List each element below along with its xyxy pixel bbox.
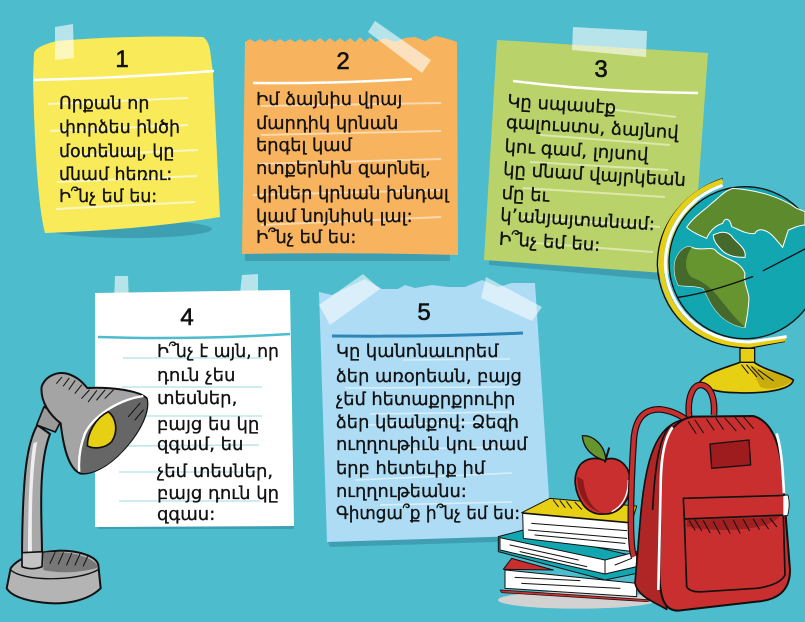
- note 3 guide lines: [523, 109, 676, 252]
- icon: stack of books: [498, 498, 657, 609]
- note 3 riddle text: կը մնամ վայրկեան: [503, 159, 686, 191]
- apple leaf: [582, 436, 606, 461]
- note 2 paper: [242, 36, 458, 255]
- note 1 riddle text: մօտենալ, կը: [59, 142, 174, 162]
- icon: globe: [657, 179, 805, 393]
- bottom book page lines: [515, 577, 620, 588]
- note 4 heading rule: [98, 334, 290, 338]
- books shadow: [498, 591, 657, 609]
- note 3 shadow: [489, 258, 660, 280]
- panel: note 5 blue: [319, 274, 560, 547]
- note 1 number: 1: [115, 46, 129, 73]
- middle book: [498, 530, 637, 580]
- note 4 riddle text: չեմ տեսներ,: [157, 461, 273, 482]
- note 5 riddle text: ուղղութեանս:: [336, 481, 467, 502]
- backpack hatch marks: [688, 417, 777, 534]
- backpack pocket flap: [683, 495, 789, 519]
- note 4 riddle text: Ի՞նչ է այն, որ: [157, 341, 279, 362]
- note 3 paper: [484, 40, 708, 275]
- note 3 number: 3: [594, 56, 608, 83]
- globe land shading: [674, 247, 745, 327]
- panel: note 1 yellow: [33, 24, 220, 238]
- lamp shade inner: [80, 397, 147, 473]
- note 2 guide lines: [253, 103, 441, 225]
- lamp sleeve: [22, 552, 43, 569]
- globe equator: [678, 249, 805, 297]
- apple highlight: [612, 480, 628, 512]
- note 4 paper: [95, 290, 294, 527]
- bottom book spine: [500, 590, 653, 602]
- top book pages: [523, 513, 633, 552]
- note 4 shadow: [98, 524, 294, 529]
- note 5 number: 5: [417, 299, 431, 326]
- lamp base: [7, 551, 101, 603]
- globe sphere: [669, 187, 805, 339]
- note 5 riddle text: ձեր առօրեան, բայց: [336, 366, 522, 387]
- note 2 riddle text: կիներ կրնան խնդալ: [256, 183, 450, 204]
- globe stand post: [740, 348, 755, 362]
- apple body: [575, 458, 631, 514]
- globe base shading: [750, 365, 793, 389]
- note 4 riddle text: դուն չես: [157, 365, 235, 386]
- backpack label patch: [710, 440, 751, 468]
- lamp hatch marks: [50, 377, 143, 566]
- note 3 riddle text: գալուստս, ձայնով: [505, 112, 680, 144]
- backpack top handle: [689, 385, 714, 418]
- note 2 number: 2: [336, 48, 350, 75]
- top book hatch marks: [553, 500, 582, 509]
- bottom book: [500, 558, 653, 602]
- note 2 riddle text: ոտքերնին զարնել,: [256, 158, 431, 179]
- lamp bulb: [87, 412, 116, 448]
- note 5 riddle text: [336, 341, 528, 524]
- note 4 riddle text: բայց ես կը: [157, 414, 259, 435]
- note 1 riddle text: [59, 94, 180, 207]
- note 3 riddle text: մը եւ: [501, 183, 551, 207]
- note 4 guide lines: [119, 358, 263, 501]
- note 2 riddle text: Իմ ձայնիս վրայ: [256, 89, 402, 110]
- globe land arabia: [713, 232, 745, 257]
- backpack pocket: [684, 515, 785, 592]
- note 5 paper: [319, 279, 552, 542]
- note 2 heading rule: [253, 79, 412, 83]
- apple shading: [577, 477, 603, 513]
- lamp shade: [41, 373, 147, 474]
- bottom book top cover: [503, 558, 553, 570]
- middle book page lines: [510, 545, 632, 567]
- backpack body: [659, 416, 790, 611]
- note 5 riddle text: ուղղութիւն կու տամ: [336, 434, 528, 455]
- globe base hatch marks: [742, 365, 773, 381]
- note 3 riddle text: Ի՞նչ եմ ես:: [498, 229, 601, 256]
- note 4 riddle text: բայց դուն կը: [157, 483, 279, 504]
- lamp arm: [22, 425, 50, 553]
- note 5 riddle text: չեմ հետաքրքրուիր: [336, 389, 515, 410]
- note 1 riddle text: մնամ հեռու:: [59, 165, 172, 185]
- apple stem: [605, 448, 609, 462]
- note 5 riddle text: ձեր կեանքով: Ձեզի: [336, 412, 519, 433]
- note 4 riddle text: զգամ, ես: [157, 434, 243, 455]
- note 5 shadow: [327, 534, 560, 547]
- top book cover: [522, 498, 637, 523]
- note 1 tape: [55, 24, 74, 60]
- note 1 guide lines: [48, 98, 198, 209]
- bottom book pages: [505, 570, 637, 597]
- note 1 riddle text: փորձես ինծի: [59, 118, 180, 138]
- note 4 riddle text: [157, 341, 279, 525]
- note 3 riddle text: [498, 91, 691, 261]
- note 5 heading rule: [332, 333, 523, 336]
- backpack pocket shade: [687, 517, 780, 530]
- lamp base top shading: [43, 552, 98, 572]
- note 1 paper: [33, 36, 220, 233]
- note 4 riddle text: զգաս:: [157, 504, 215, 525]
- backpack side panel: [635, 420, 682, 609]
- note 2 riddle text: Ի՞նչ եմ ես:: [256, 227, 356, 248]
- note 3 heading rule: [513, 81, 698, 93]
- note 1 riddle text: Ի՞նչ եմ ես:: [59, 186, 157, 207]
- note 2 tape: [368, 21, 431, 73]
- note 3 riddle text: Կը սպասէք: [507, 91, 617, 119]
- note 5 guide lines: [345, 359, 512, 505]
- backpack edge highlight: [658, 427, 784, 590]
- panel: note 2 orange: [242, 21, 458, 261]
- note 2 shadow: [245, 252, 450, 261]
- globe stand base: [700, 362, 793, 393]
- lamp arm shading: [28, 442, 37, 552]
- globe land africa: [674, 247, 749, 327]
- note 2 riddle text: երգել կամ: [256, 135, 353, 156]
- panel: note 4 white: [95, 274, 294, 529]
- backpack flap end: [783, 495, 789, 515]
- note 5 riddle text: Կը կանոնաւորեմ: [336, 341, 499, 362]
- note 5 left tape: [319, 274, 380, 325]
- middle book teal cover: [498, 530, 637, 580]
- icon: red backpack: [631, 385, 790, 611]
- note 5 right tape: [481, 277, 542, 321]
- note 1 shadow: [48, 220, 212, 238]
- note 2 riddle text: [256, 89, 450, 248]
- note 3 tape: [572, 27, 647, 57]
- icon: desk lamp: [7, 373, 147, 603]
- backpack inner strap line: [653, 425, 672, 509]
- icon: apple: [575, 436, 631, 514]
- note 5 riddle text: երբ հետեւիք իմ: [336, 458, 486, 479]
- globe meridian arc: [657, 179, 785, 348]
- top book: [522, 498, 637, 552]
- note 5 riddle text: Գիտցա՞ք ի՞նչ եմ ես:: [336, 503, 520, 524]
- lamp rim highlight: [79, 396, 143, 472]
- panel: note 3 green: [484, 27, 708, 280]
- backpack shoulder strap: [631, 409, 687, 557]
- note 1 heading rule: [34, 71, 214, 80]
- lamp neck: [37, 407, 62, 432]
- note 4 number: 4: [180, 304, 194, 331]
- note 1 riddle text: Որքան որ: [59, 94, 149, 114]
- note 2 riddle text: կամ նոյնիսկ լալ:: [256, 206, 413, 227]
- note 4 left tape: [114, 276, 129, 305]
- globe land eurasia: [687, 188, 805, 247]
- note 3 riddle text: կու գամ, լոյսով: [504, 136, 650, 166]
- middle book pages: [500, 538, 605, 574]
- note 4 riddle text: տեսներ,: [157, 388, 237, 409]
- note 3 riddle text: կ՚անյայտանամ:: [500, 205, 656, 235]
- note 4 right tape: [239, 274, 258, 305]
- note 2 riddle text: մարդիկ կրնան: [256, 113, 398, 134]
- top book page lines: [528, 523, 627, 543]
